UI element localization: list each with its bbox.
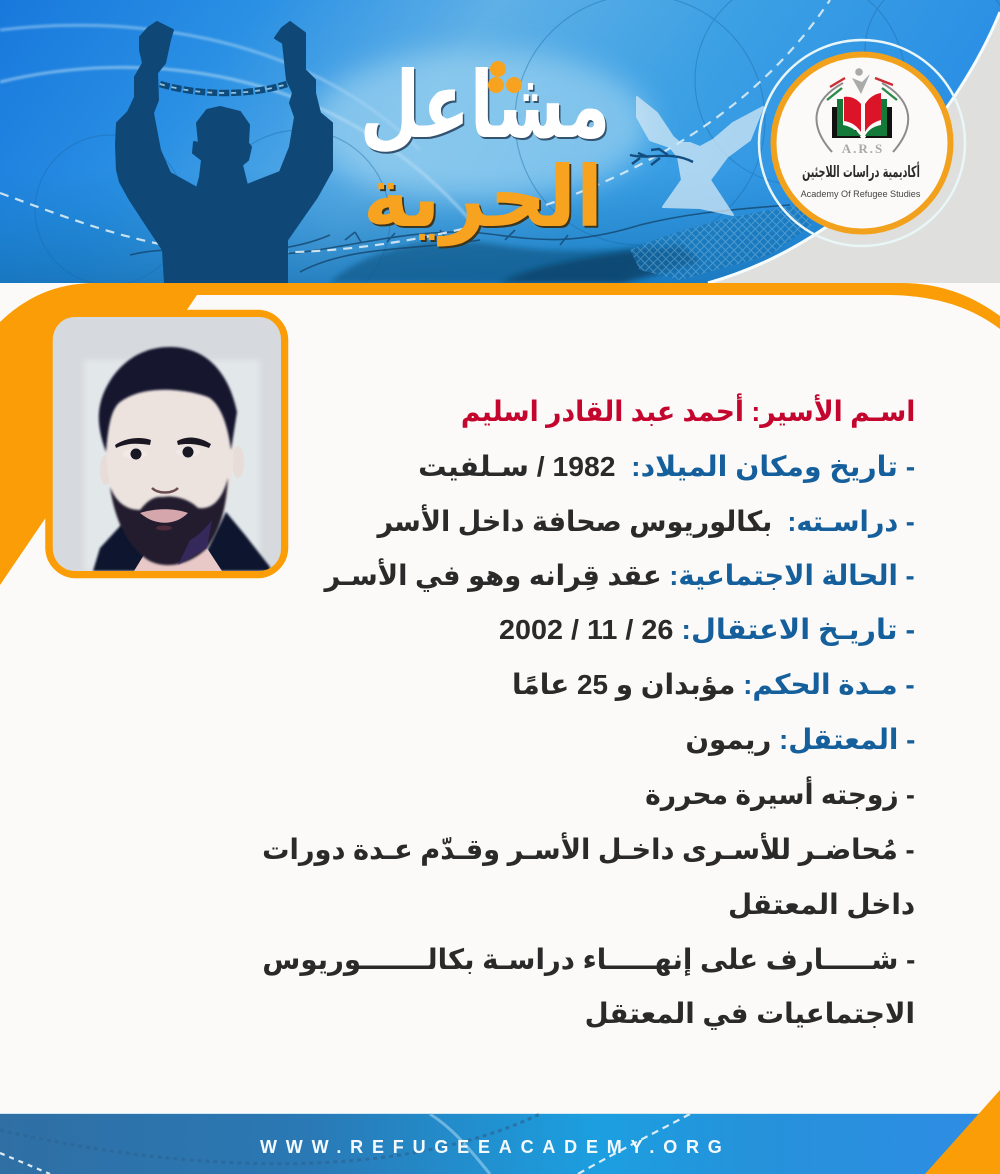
photo card	[49, 314, 284, 574]
logo badge: أكاديمية دراسات اللاجئين	[802, 161, 920, 182]
icon: dove	[630, 97, 763, 215]
bachelor note continued: الاجتماعيات في المعتقل	[585, 998, 915, 1029]
blue sky background	[0, 0, 1000, 310]
white arc edge	[708, 12, 1000, 283]
header banner	[0, 0, 1000, 310]
title: Mashaal Al-Hurriya: مشاعل	[360, 53, 610, 160]
bachelor note: - شـــــارف على إنهـــــاء دراسـة بكالـــــــوريوس	[262, 944, 915, 975]
title: Mashaal Al-Hurriya: مشاعل	[361, 55, 612, 162]
dark ground	[330, 241, 660, 283]
logo book	[832, 93, 892, 138]
title: Mashaal Al-Hurriya: الحرية	[365, 151, 605, 249]
footer band	[0, 1090, 1000, 1174]
ears	[100, 455, 110, 485]
wife note: - زوجته أسيرة محررة	[645, 779, 915, 810]
logo text: A.R.S	[842, 141, 884, 156]
lecturer note continued: داخل المعتقل	[728, 889, 915, 920]
prison: - المعتقل: ريمون	[685, 724, 915, 755]
mouth	[140, 509, 188, 523]
title: Mashaal Al-Hurriya	[360, 53, 612, 249]
lecturer note: - مُحاضـر للأسـرى داخـل الأسـر وقـدّم عـدة دورات	[263, 834, 915, 865]
marital status: - الحالة الاجتماعية: عقد قِرانه وهو في الأسـر	[325, 560, 915, 591]
beard	[110, 478, 228, 565]
prisoner name: اسـم الأسير: أحمد عبد القادر اسليم	[461, 396, 915, 427]
barbed wire	[130, 205, 790, 272]
birth date and place: - تاريخ ومكان الميلاد: 1982 / سـلفيت	[418, 451, 915, 482]
title: Mashaal Al-Hurriya: الحرية	[363, 149, 603, 247]
logo badge	[759, 40, 965, 246]
logo badge: Academy Of Refugee Studies	[801, 189, 921, 199]
fence mesh	[630, 205, 812, 280]
eyes and brows	[115, 437, 211, 460]
sentence: - مـدة الحكم: مؤبدان و 25 عامًا	[512, 669, 915, 700]
icon: prisoner silhouette with chain	[116, 22, 332, 283]
portrait	[53, 317, 281, 571]
arrest date: - تاريـخ الاعتقال: 26 / 11 / 2002	[499, 614, 915, 645]
orange frame band	[0, 283, 1000, 585]
razor wire arcs	[35, 0, 1000, 310]
footer website: WWW.REFUGEEACADEMY.ORG	[260, 1137, 731, 1157]
face	[106, 390, 234, 509]
logo arcs	[816, 78, 908, 152]
footer corner	[925, 1090, 1000, 1174]
biography text block	[262, 393, 915, 1030]
studies: - دراسـته: بكالوريوس صحافة داخل الأسر	[378, 506, 915, 537]
shirt	[93, 512, 270, 571]
dashed line	[0, 0, 830, 253]
hair	[99, 347, 237, 452]
